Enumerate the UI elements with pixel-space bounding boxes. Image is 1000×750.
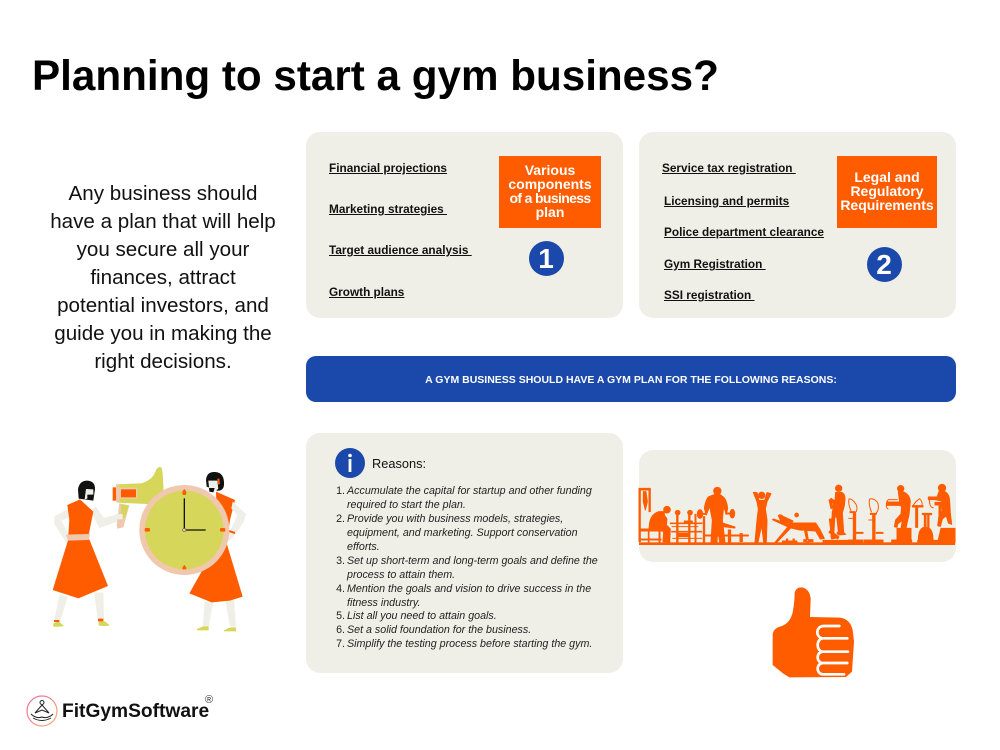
reason 2: Provide you with business models, strategies, bbox=[347, 513, 563, 525]
reason 3: 3. bbox=[336, 555, 345, 567]
panel: reasons bbox=[306, 433, 623, 673]
intro paragraph: you secure all your bbox=[77, 238, 249, 261]
reason 3: process to attain them. bbox=[347, 569, 455, 581]
megaphone bbox=[113, 467, 164, 529]
reason 4 bbox=[336, 583, 591, 609]
banner bbox=[306, 356, 956, 402]
rider 2 bbox=[898, 486, 904, 492]
reason 4: fitness industry. bbox=[347, 597, 420, 609]
logo mark bbox=[26, 695, 58, 727]
dumbbell rack bbox=[675, 510, 680, 515]
woman with hands behind head bbox=[758, 492, 765, 498]
reason 5: List all you need to attain goals. bbox=[347, 610, 497, 622]
intro paragraph: have a plan that will help bbox=[50, 210, 276, 233]
reason 4: 4. bbox=[336, 583, 345, 595]
orange heading box: components bbox=[508, 176, 592, 192]
reason 6: 6. bbox=[336, 624, 345, 636]
reason 7: Simplify the testing process before starting the gym. bbox=[347, 638, 592, 650]
reason 2: 2. bbox=[336, 513, 345, 525]
reason 1: required to start the plan. bbox=[347, 499, 466, 511]
icon: thumbs up bbox=[772, 587, 854, 678]
number badge 1: 1 bbox=[538, 242, 554, 274]
number badge 2 bbox=[866, 246, 902, 282]
rider 4 bbox=[938, 484, 946, 492]
title: Planning to start a gym business? bbox=[32, 52, 719, 99]
standing man with barbell bbox=[714, 487, 721, 495]
link: target audience analysis: Target audience analysis bbox=[329, 243, 468, 257]
reason 1: Accumulate the capital for startup and other funding bbox=[347, 485, 592, 497]
logo wordmark: FitGymSoftware bbox=[62, 701, 209, 722]
clock bbox=[139, 485, 229, 575]
orange heading box bbox=[499, 156, 601, 228]
link: police department clearance: Police department clearance bbox=[664, 225, 824, 239]
panel: gym silhouette bbox=[639, 450, 956, 562]
orange heading box: Legal and bbox=[854, 169, 920, 185]
link: growth plans: Growth plans bbox=[329, 285, 404, 299]
cyclist 1 bbox=[836, 485, 842, 492]
reasons heading: Reasons: bbox=[372, 456, 426, 471]
hand on handle bbox=[117, 514, 123, 519]
link: service tax registration: Service tax registration bbox=[662, 161, 792, 175]
link: licensing and permits: Licensing and permits bbox=[664, 194, 789, 208]
reason 5: 5. bbox=[336, 610, 345, 622]
panel: business plan components bbox=[306, 132, 623, 318]
icon: info bbox=[335, 448, 365, 478]
reason 6: Set a solid foundation for the business. bbox=[347, 624, 531, 636]
reason 1: 1. bbox=[336, 485, 345, 497]
banner: A GYM BUSINESS SHOULD HAVE A GYM PLAN FOR THE FOLLOWING REASONS: bbox=[425, 374, 837, 386]
intro paragraph bbox=[50, 182, 276, 373]
elliptical machines bbox=[848, 512, 863, 542]
link: gym registration: Gym Registration bbox=[664, 257, 762, 271]
bike 3 bbox=[922, 513, 932, 528]
intro paragraph: guide you in making the bbox=[54, 322, 272, 345]
bench press bbox=[795, 513, 798, 517]
logo: FitGymSoftware bbox=[26, 694, 213, 727]
reason 2: efforts. bbox=[347, 541, 380, 553]
number badge 2: 2 bbox=[876, 248, 892, 280]
orange heading box: Requirements bbox=[840, 197, 934, 213]
illustration: two women, megaphone and clock bbox=[52, 467, 246, 632]
orange heading box: Regulatory bbox=[850, 183, 924, 199]
seated man and bench bbox=[664, 506, 670, 513]
registered mark: ® bbox=[205, 694, 213, 706]
reason 2 bbox=[336, 513, 578, 553]
reason 1 bbox=[336, 485, 592, 511]
link: marketing strategies: Marketing strategies bbox=[329, 202, 444, 216]
number badge 1 bbox=[528, 240, 564, 276]
orange heading box bbox=[837, 156, 937, 228]
left woman bbox=[53, 481, 123, 627]
intro paragraph: potential investors, and bbox=[57, 294, 269, 317]
orange heading box: plan bbox=[536, 204, 564, 220]
rack bbox=[639, 488, 650, 542]
intro paragraph: right decisions. bbox=[94, 350, 232, 373]
link: SSI registration: SSI registration bbox=[664, 288, 751, 302]
reason 3 bbox=[336, 555, 598, 581]
right woman bbox=[189, 472, 246, 631]
illustration: gym silhouettes bbox=[638, 484, 956, 545]
panel: legal and regulatory requirements bbox=[639, 132, 956, 318]
reason 3: Set up short-term and long-term goals and define the bbox=[347, 555, 598, 567]
reason 7: 7. bbox=[336, 638, 345, 650]
orange heading box: of a business bbox=[509, 190, 591, 206]
reason 4: Mention the goals and vision to drive success in the bbox=[347, 583, 591, 595]
intro paragraph: finances, attract bbox=[90, 266, 236, 289]
intro paragraph: Any business should bbox=[69, 182, 257, 205]
orange heading box: Various bbox=[525, 162, 575, 178]
link: financial projections: Financial projections bbox=[329, 161, 447, 175]
reason 2: equipment, and marketing. Support conservation bbox=[347, 527, 578, 539]
